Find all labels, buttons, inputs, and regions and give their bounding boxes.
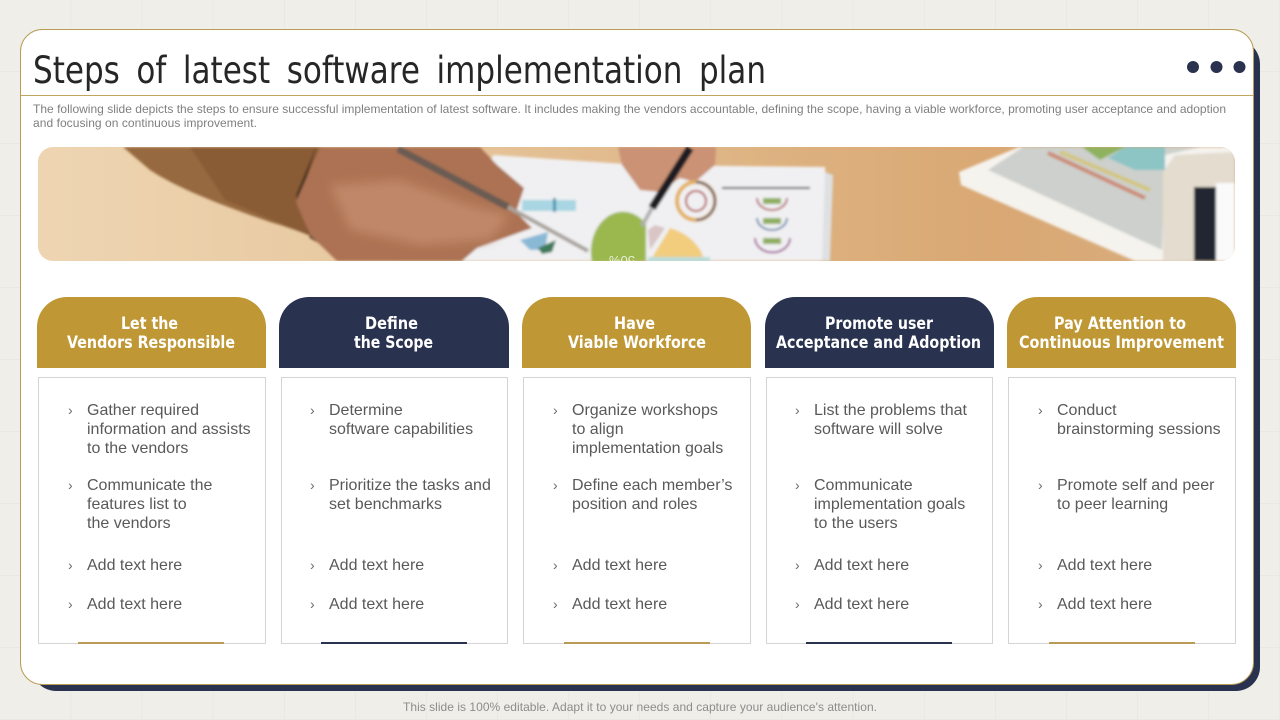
column 1 header: Vendors Responsible [67,333,235,353]
column 3 bullets: Add text here [572,557,667,574]
column 2 bullets: software capabilities [329,421,473,438]
column 1 bullets: › [68,477,73,493]
photo: hands reviewing charts on a wooden desk: 50% [609,253,635,268]
column 4 card [766,378,992,644]
column 3 bullets: implementation goals [572,440,723,457]
column 3 header: Viable Workforce [568,333,706,353]
column 3 bullets: Organize workshops [572,402,718,419]
column 3 card [524,378,750,644]
column 2 bullets: Determine [329,402,403,419]
column 2 bullets: Add text here [329,596,424,613]
column 4 accent line [806,642,952,644]
column 1 bullets: features list to [87,496,187,513]
column 2 bullets [310,402,491,613]
column 5 bullets: brainstorming sessions [1057,421,1221,438]
column 3 bullets: › [553,477,558,493]
column 5 bullets: › [1038,402,1043,418]
column 4 bullets: › [795,596,800,612]
column 5 bullets: Add text here [1057,557,1152,574]
column 5 bullets: › [1038,477,1043,493]
column 4 header: Promote user [825,314,934,334]
column 2 header: Define [365,314,418,334]
column 1 bullets: the vendors [87,515,171,532]
column 2 bullets: Add text here [329,557,424,574]
column 4 bullets: to the users [814,515,898,532]
column 1 bullets: › [68,557,73,573]
column 4 bullets: List the problems that [814,402,968,419]
column 4 bullets: implementation goals [814,496,965,513]
column 3: Have Viable Workforce [522,297,751,644]
column 2 bullets: › [310,596,315,612]
photo: hands reviewing charts on a wooden desk [38,147,1235,268]
column 4 bullets: › [795,557,800,573]
column 2 bullets: › [310,402,315,418]
column 1 accent line [78,642,224,644]
column 2: Define the Scope [279,297,509,644]
column 2 bullets: › [310,557,315,573]
column 1 bullets: Add text here [87,557,182,574]
column 4 bullets: › [795,477,800,493]
column 5 header [1007,297,1236,368]
column 3 bullets: › [553,557,558,573]
column 1 bullets: information and assists [87,421,251,438]
column 3 bullets: › [553,596,558,612]
column 5 card [1008,378,1236,644]
icon: three dots [1187,61,1246,73]
column 1 bullets: › [68,596,73,612]
column 4 header: Acceptance and Adoption [776,333,981,353]
column 5 bullets: › [1038,596,1043,612]
column 3 bullets: › [553,402,558,418]
column 5 bullets: Conduct [1057,402,1117,419]
column 5 header: Continuous Improvement [1019,333,1224,353]
column 4 bullets: › [795,402,800,418]
column 4 header [765,297,994,368]
column 5 accent line [1049,642,1195,644]
column 5 bullets: to peer learning [1057,496,1168,513]
title divider [21,95,1253,96]
column 2 bullets: › [310,477,315,493]
column 1: Let the Vendors Responsible [37,297,266,644]
column 1 bullets [68,402,251,613]
column 1 bullets: Add text here [87,596,182,613]
column 1 header [37,297,266,368]
column 2 bullets: Prioritize the tasks and [329,477,491,494]
column 5 bullets [1038,402,1221,613]
column 4 bullets [795,402,968,613]
column 4: Promote user Acceptance and Adoption [765,297,994,644]
column 2 header: the Scope [354,333,433,353]
column 3 bullets: position and roles [572,496,697,513]
footer note: This slide is 100% editable. Adapt it to your needs and capture your audience's attention. [403,700,877,714]
column 4 bullets: Add text here [814,557,909,574]
column 3 bullets: to align [572,421,624,438]
column 5 bullets: › [1038,557,1043,573]
column 3 header [522,297,751,368]
column 4 bullets: software will solve [814,421,943,438]
column 1 card [38,378,266,644]
column 5 header: Pay Attention to [1054,314,1186,334]
column 2 accent line [321,642,467,644]
column 5 bullets: Promote self and peer [1057,477,1215,494]
column 1 header: Let the [121,314,178,334]
column 3 bullets [553,402,732,613]
column 4 bullets: Communicate [814,477,913,494]
title: Steps of latest software implementation plan [33,49,766,92]
column 1 bullets: Communicate the [87,477,212,494]
column 2 bullets: set benchmarks [329,496,442,513]
description text: The following slide depicts the steps to ensure successful implementation of latest software. It includes making the vendors accountable, defining the scope, having a viable workforce, promoting user acceptance and adoption [33,102,1226,116]
column 3 bullets: Add text here [572,596,667,613]
column 2 card [282,378,508,644]
description text: and focusing on continuous improvement. [33,116,257,130]
column 2 header [279,297,509,368]
column 5 bullets: Add text here [1057,596,1152,613]
column 3 accent line [564,642,710,644]
column 1 bullets: to the vendors [87,440,188,457]
column 5: Pay Attention to Continuous Improvement [1007,297,1236,644]
column 3 bullets: Define each member’s [572,477,732,494]
description text [33,102,1226,130]
column 3 header: Have [614,314,655,334]
column 1 bullets: Gather required [87,402,199,419]
column 1 bullets: › [68,402,73,418]
column 4 bullets: Add text here [814,596,909,613]
